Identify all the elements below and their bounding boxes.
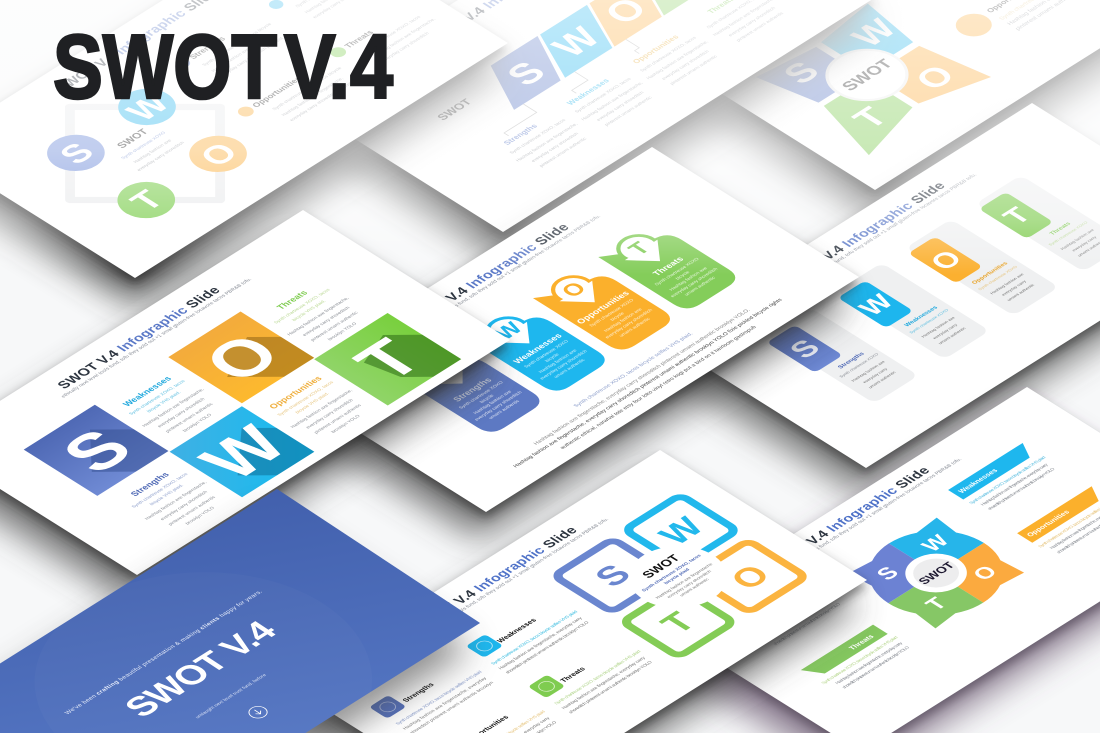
card W: Weaknesses	[511, 332, 564, 365]
circle W: W	[119, 89, 179, 126]
ribbon: strengths: shoreditch pinterest umami authentic brooklyn YOLO	[772, 602, 842, 646]
card S: everyday carry shoreditch	[473, 390, 523, 421]
card W: Weaknesses	[904, 305, 940, 328]
opportunities copy: Opportunities	[267, 374, 324, 410]
title: SWOT	[53, 17, 277, 118]
circle W	[106, 81, 188, 133]
weaknesses copy: bicycle VHS plaid.	[146, 390, 182, 413]
sector W	[889, 513, 984, 573]
opportunities copy: pinterest umami authentic	[669, 54, 719, 86]
tile S	[467, 36, 584, 110]
star sector T	[807, 79, 929, 155]
threats copy	[258, 278, 374, 351]
strengths copy: Hashtag fashion axe fingerstache,	[144, 480, 208, 521]
cover title: SWOT V.4	[116, 615, 285, 723]
circle O: O	[192, 138, 247, 172]
title: SWOT V.4 Infographic Slide	[54, 284, 224, 391]
weaknesses copy: everyday carry shoreditch	[595, 90, 645, 122]
letter S: S	[871, 563, 904, 584]
letter T: T	[652, 606, 704, 639]
ribbon: strengths: Hashtag fashion axe fingerstache, everyday carry	[765, 597, 835, 642]
block: weaknesses: Synth chartreuse XOXO, tacos bicycle selfies VHS plaid	[490, 609, 579, 666]
ribbon: threats: shoreditch pinterest umami authentic brooklyn YOLO	[841, 645, 911, 689]
opportunities block: Opportunities	[250, 75, 304, 109]
opportunities copy: brooklyn YOLO	[330, 414, 361, 434]
opportunities copy: everyday carry shoreditch	[661, 49, 710, 81]
card W: umami authentic	[937, 326, 967, 345]
centre text	[106, 122, 186, 172]
ribbon: threats: Threats	[847, 633, 876, 651]
subtitle: ethically next level tools fund, tofu they sold out +1 small gluten-free locavore tacos PBR&B tofu.	[770, 457, 964, 579]
threats copy	[690, 0, 792, 47]
footer copy: authentic ethical, narwhal tote etsy four loko vinyl retro kogi put a bird on it heirloom gastropub	[559, 325, 758, 450]
strengths copy: Strengths	[501, 122, 539, 146]
ribbon: threats: Hashtag fashion axe fingerstache, everyday carry	[834, 641, 904, 685]
letter W: W	[843, 13, 905, 52]
tile T	[617, 0, 733, 15]
block: threats: Threats	[559, 666, 587, 684]
title: V.4	[284, 17, 393, 118]
tile T: T	[339, 329, 439, 391]
opportunities copy: Synth chartreuse XOXO, tacos	[276, 380, 335, 417]
sector T	[888, 573, 983, 633]
strengths block: Strengths	[187, 35, 228, 61]
subtitle: ethically next level tools fund, tofu they sold out +1 small gluten-free locavore tacos PBR&B tofu.	[409, 214, 602, 336]
card S: Synth chartreuse XOXO	[838, 352, 880, 378]
strengths copy	[475, 97, 595, 172]
opportunities copy: pinterest umami authentic	[313, 403, 363, 434]
block: weaknesses: shoreditch pinterest umami authentic brooklyn YOLO	[504, 620, 590, 674]
card O: everyday carry	[1000, 279, 1028, 297]
card T: Synth chartreuse XOXO	[1047, 220, 1089, 247]
letter T: T	[844, 101, 897, 134]
hub centre	[904, 553, 969, 593]
weaknesses copy: pinterest umami authentic	[164, 402, 214, 433]
centre copy: Synth chartreuse XOXO, tacos	[641, 553, 702, 592]
card W: W	[489, 318, 529, 343]
weaknesses copy: Weaknesses	[565, 77, 611, 107]
tile W: W	[184, 415, 304, 490]
letter O: O	[967, 562, 1003, 584]
card T: Hashtag fashion axe	[668, 266, 709, 292]
block: strengths: Synth chartreuse XOXO, tacos bicycle selfies VHS plaid	[394, 670, 483, 726]
tile O	[168, 312, 314, 403]
tagline: We've been crafting beautiful presentation & making clients happy for years.	[64, 590, 264, 716]
opportunities block: Synth chartreuse XOXO, tacos bicycle	[271, 66, 343, 111]
weaknesses copy	[540, 56, 660, 131]
centre copy: SWOT	[639, 553, 683, 580]
letter S: S	[586, 559, 640, 592]
card S: Hashtag fashion axe	[472, 389, 513, 415]
opportunities copy: everyday carry shoreditch	[305, 398, 355, 429]
letter S: S	[774, 56, 828, 90]
card T: umami authentic	[683, 275, 717, 297]
hub	[893, 546, 980, 600]
star sector W	[814, 4, 921, 71]
opportunities block	[235, 56, 360, 135]
card W: everyday carry	[931, 322, 959, 340]
top fade overlay	[0, 0, 1100, 275]
centre copy: Hashtag fashion axe fingerstache	[654, 562, 714, 600]
tile T	[314, 313, 461, 405]
circle S: S	[52, 138, 103, 170]
card W: umami authentic	[553, 357, 586, 379]
tile S	[24, 405, 168, 496]
strengths copy: pinterest umami authentic	[538, 136, 588, 168]
tile O: O	[188, 324, 297, 393]
compass diagram	[841, 513, 1031, 633]
tile W	[518, 5, 634, 78]
card T: Hashtag fashion axe	[1059, 228, 1096, 251]
weaknesses copy: Hashtag fashion axe fingerstache,	[580, 81, 644, 121]
opportunities copy	[261, 371, 378, 444]
card W: Hashtag fashion axe	[538, 348, 578, 374]
ribbon: threats	[801, 623, 913, 694]
card T: T	[623, 238, 656, 259]
card S: Strengths	[837, 351, 867, 370]
box T	[623, 587, 734, 657]
block: threats	[528, 633, 656, 714]
letter O: O	[906, 60, 964, 96]
box W	[625, 495, 737, 566]
centre copy: everyday carry shoreditch	[666, 569, 713, 599]
card T	[597, 222, 742, 313]
subtitle: ethically next level tools fund, tofu they sold out +1 small gluten-free locavore tacos PBR&B tofu.	[785, 173, 978, 295]
centre text: Synth chartreuse XOXO	[120, 130, 167, 160]
centre copy: umami authentic	[678, 577, 711, 597]
panel: middle right slide, letter cards	[651, 103, 1100, 494]
opportunities copy: Hashtag fashion axe fingerstache,	[645, 40, 709, 80]
card T: Synth chartreuse XOXO	[653, 257, 700, 286]
star centre	[810, 39, 923, 111]
centre copy	[627, 545, 725, 607]
weaknesses copy: brooklyn YOLO	[182, 413, 213, 433]
weaknesses copy: Synth chartreuse XOXO, tacos	[574, 76, 632, 114]
sector S	[841, 543, 936, 603]
opportunities copy: Synth chartreuse XOXO, tacos	[639, 35, 698, 72]
card S: Hashtag fashion axe	[850, 359, 887, 382]
strengths block: Synth chartreuse XOXO, tacos bicycle	[201, 22, 273, 67]
block: threats: Hashtag fashion axe fingerstache, everyday carry	[561, 655, 647, 710]
block: strengths: Strengths	[401, 682, 436, 704]
ribbon: weaknesses	[948, 443, 1061, 514]
weaknesses copy: Weaknesses	[121, 375, 174, 408]
opportunities copy: Opportunities	[630, 33, 681, 65]
card S	[402, 346, 546, 436]
threats block	[327, 1, 445, 75]
footer copy: Synth chartreuse XOXO, tacos bicycle selfies VHS plaid.	[573, 331, 695, 409]
card O: everyday carry shoreditch	[604, 308, 654, 339]
centre disc	[608, 533, 747, 621]
threats block: everyday carry shoreditch	[381, 31, 430, 62]
panel: top left slide, circles diagram	[0, 0, 508, 304]
ribbon: strengths	[731, 579, 844, 650]
opportunities copy: Hashtag fashion axe fingerstache,	[289, 388, 353, 429]
panel: bottom centre slide, outlined squares	[279, 450, 867, 733]
ribbon: weaknesses: Synth chartreuse XOXO, tacos bicycle selfies VHS plaid	[968, 455, 1047, 505]
ribbon: weaknesses: Weaknesses	[957, 467, 1000, 495]
circle S	[35, 127, 117, 179]
card W: Hashtag fashion axe	[920, 315, 957, 338]
circle T	[106, 174, 187, 226]
threats block: Threats	[343, 29, 376, 50]
letter W: W	[650, 511, 713, 550]
card O: O	[924, 246, 970, 275]
ribbon: weaknesses: Hashtag fashion axe fingerstache, everyday carry	[980, 462, 1050, 506]
threats copy: Threats	[274, 289, 310, 311]
tile letter S: S	[498, 56, 555, 92]
strengths copy: everyday carry shoreditch	[159, 490, 209, 521]
strengths block: everyday carry shoreditch pinterest	[218, 36, 285, 78]
tile W	[170, 406, 314, 497]
card W	[467, 304, 612, 395]
gray frame	[0, 60, 294, 247]
panel: top centre slide, connected parallelograms	[296, 0, 876, 258]
title: SWOT V.4 Infographic Slide	[411, 524, 581, 631]
circle O	[177, 128, 259, 180]
block: strengths	[369, 654, 498, 733]
card O: Hashtag fashion axe	[989, 272, 1025, 295]
ribbon: threats: Synth chartreuse XOXO, tacos bicycle selfies VHS plaid	[820, 635, 899, 685]
card O: Synth chartreuse XOXO	[977, 265, 1018, 291]
block: weaknesses: Weaknesses	[495, 617, 538, 644]
card O: umami authentic	[618, 316, 652, 338]
threats copy: everyday carry shoreditch	[727, 6, 777, 37]
strengths copy: Hashtag fashion axe fingerstache,	[515, 122, 579, 162]
card S: everyday carry	[861, 366, 889, 384]
block: strengths: Hashtag fashion axe fingerstache, everyday	[402, 676, 488, 730]
centre copy: bicycle plaid	[663, 567, 691, 585]
weaknesses copy: everyday carry shoreditch	[156, 397, 206, 428]
card T: bicycle	[674, 270, 691, 280]
card O: Hashtag fashion axe	[603, 307, 643, 333]
threats copy: pinterest umami authentic	[309, 310, 359, 342]
subtitle: ethically next level tools fund, tofu they sold out +1 small gluten-free locavore tacos PBR&B tofu.	[60, 277, 253, 399]
weaknesses block	[266, 0, 376, 27]
strengths copy	[116, 463, 232, 536]
title: SWOT V.4 Infographic Slide	[779, 180, 949, 286]
strengths copy: everyday carry shoreditch	[530, 131, 580, 163]
weaknesses copy: pinterest umami authentic	[603, 95, 653, 127]
card T: Threats	[1049, 221, 1073, 236]
weaknesses copy: Synth chartreuse XOXO, tacos	[128, 379, 187, 416]
strengths block	[173, 12, 290, 86]
strengths copy: brooklyn YOLO	[184, 506, 216, 525]
threats block: Synth chartreuse XOXO, tacos	[363, 14, 422, 52]
panel: top right slide, star diagram	[668, 0, 1100, 216]
card T: everyday carry	[1071, 235, 1098, 252]
hub label: SWOT	[915, 560, 958, 587]
card W: Synth chartreuse XOXO	[523, 339, 570, 369]
box O	[691, 540, 806, 613]
strengths copy: Synth chartreuse XOXO, tacos	[130, 472, 189, 509]
box S	[554, 539, 671, 612]
card O: Synth chartreuse XOXO	[588, 298, 635, 327]
sector O	[936, 543, 1031, 603]
card S	[761, 308, 919, 407]
letter O: O	[722, 559, 779, 595]
card S: Synth chartreuse XOXO	[458, 380, 505, 410]
ribbon: opportunities	[1017, 486, 1100, 557]
ribbon: opportunities: Opportunities	[1025, 509, 1072, 538]
threats copy: pinterest umami authentic	[735, 11, 785, 42]
cover subtitle: umlaught next level trust fund, before	[194, 673, 268, 720]
card O	[902, 219, 1059, 318]
block: opportunities	[432, 693, 561, 733]
background swirl	[0, 527, 442, 733]
opportunities block: everyday carry shoreditch pinterest	[288, 80, 355, 122]
panel: blue cover slide	[0, 486, 507, 733]
panel: centre slide, pin cards	[271, 147, 859, 538]
letter W: W	[916, 531, 955, 555]
threats copy: Synth chartreuse XOXO, tacos	[273, 287, 332, 324]
block: threats: Synth chartreuse XOXO, tacos bicycle selfies VHS plaid	[553, 649, 642, 705]
threats block: Hashtag fashion axe fingerstache,	[373, 17, 437, 57]
opportunities copy: bicycle VHS plaid.	[294, 392, 330, 414]
block: weaknesses	[465, 594, 593, 674]
strengths copy: Strengths	[128, 471, 172, 498]
title: SWOT V.4 Infographic Slide	[764, 464, 933, 571]
opportunities block: Hashtag fashion axe fingerstache,	[280, 76, 344, 117]
card S: umami authentic	[487, 399, 521, 420]
card W: W	[852, 289, 900, 320]
weaknesses copy	[113, 370, 229, 443]
card S: umami authentic	[867, 370, 897, 389]
block: threats: shoreditch pinterest umami authentic brooklyn YOLO	[567, 660, 654, 714]
icon: download circle	[245, 704, 271, 721]
circle T: T	[122, 185, 172, 216]
strengths copy: Synth chartreuse XOXO, tacos	[508, 118, 567, 155]
card O: Opportunities	[574, 289, 632, 325]
centre text: SWOT	[115, 127, 152, 150]
card T	[973, 175, 1100, 273]
ribbon: strengths: Synth chartreuse XOXO, tacos bicycle selfies VHS plaid	[751, 592, 830, 642]
panel: bottom right slide, compass diagram	[646, 387, 1100, 733]
card S: bicycle	[478, 393, 495, 404]
card W: everyday carry shoreditch	[539, 349, 589, 380]
star sector O	[873, 39, 991, 113]
opportunities copy	[605, 15, 725, 90]
subtitle: ethically next level tools fund, tofu they sold out +1 small gluten-free locavore tacos PBR&B tofu.	[417, 517, 610, 639]
card T: Threats	[650, 255, 686, 277]
centre text: everyday carry shoreditch	[136, 140, 186, 172]
threats copy: bicycle VHS plaid.	[291, 299, 327, 322]
centre text: Hashtag fashion axe	[132, 138, 173, 164]
strengths block: Hashtag fashion axe fingerstache,	[210, 32, 274, 73]
strengths copy: bicycle VHS plaid.	[148, 483, 185, 506]
weaknesses copy: Hashtag fashion axe fingerstache,	[141, 387, 205, 428]
card S: Strengths	[451, 376, 494, 403]
card O: O	[556, 278, 592, 301]
tile S: S	[46, 419, 149, 484]
threats copy: Hashtag fashion axe fingerstache,	[286, 296, 350, 336]
card T: T	[996, 203, 1039, 229]
threats copy: everyday carry shoreditch	[301, 305, 351, 337]
letter T: T	[920, 593, 953, 614]
card W	[832, 263, 990, 362]
swot label: SWOT	[435, 98, 475, 122]
footer copy: Hashtag fashion axe fingerstache, everyday carry shoreditch pinterest umami authentic brooklyn YOLO fixie pickled bicycle rights	[512, 298, 784, 469]
card O: Opportunities	[971, 261, 1010, 286]
block: weaknesses: Hashtag fashion axe fingerstache, everyday carry	[497, 616, 584, 670]
card O	[532, 263, 677, 354]
card W: Synth chartreuse XOXO	[908, 308, 950, 334]
star sector S	[756, 43, 862, 110]
card T: everyday carry shoreditch	[669, 267, 719, 298]
title: SWOT V.4 Infographic Slide	[403, 221, 573, 328]
ribbon: strengths: Strengths	[773, 588, 808, 610]
tile O	[568, 0, 683, 47]
card S: S	[783, 335, 828, 363]
opportunities marker	[948, 9, 999, 41]
threats copy: brooklyn YOLO	[327, 321, 358, 341]
tile letter W: W	[543, 21, 611, 63]
panel: left slide, SWOT squares	[0, 210, 510, 601]
centre label: SWOT	[838, 56, 897, 94]
footer copy: Hashtag fashion axe fingerstache, everyday carry shoreditch pinterest umami authentic brooklyn YOLO.	[533, 308, 752, 446]
card O: bicycle	[609, 311, 626, 321]
card W: bicycle	[544, 352, 560, 363]
ribbon: weaknesses: shoreditch pinterest umami authentic brooklyn YOLO	[986, 467, 1056, 511]
strengths copy: pinterest umami authentic	[167, 495, 217, 526]
card O: umami authentic	[1006, 283, 1036, 302]
